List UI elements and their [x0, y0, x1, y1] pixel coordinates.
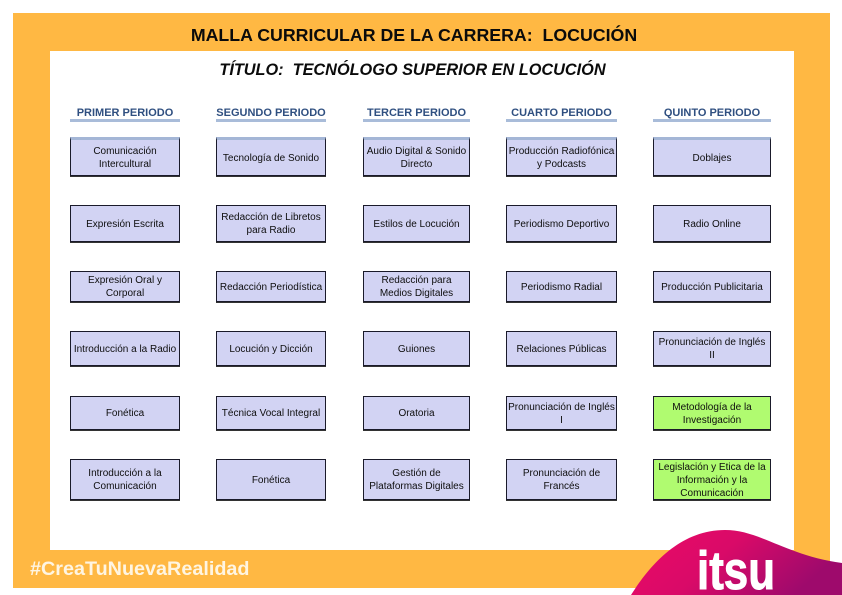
column: tercer periodo — [363, 137, 470, 501]
course — [363, 205, 470, 242]
course: Medios Digitales — [380, 288, 453, 299]
course: Pronunciación de — [523, 468, 600, 479]
course: Fonética — [106, 408, 144, 419]
course — [216, 459, 326, 500]
course: Plataformas Digitales — [369, 481, 464, 492]
course — [216, 271, 326, 302]
course — [70, 331, 180, 366]
course: green — [653, 459, 771, 500]
course: Expresión Escrita — [86, 218, 164, 230]
course: Gestión de — [392, 468, 441, 479]
course: Introducción a la — [88, 468, 162, 479]
column heading: primer periodo: PRIMER PERIODO — [77, 107, 173, 119]
course — [506, 396, 617, 430]
course — [506, 331, 617, 366]
course: green: Información y la — [677, 474, 747, 486]
column: primer periodo — [70, 137, 180, 501]
column: cuarto periodo — [506, 137, 617, 501]
course: Doblajes — [693, 152, 731, 164]
course: Producción Radiofónica — [509, 146, 614, 157]
course: Comunicación — [93, 146, 157, 157]
course: Relaciones Públicas — [516, 344, 607, 354]
column heading: tercer periodo: TERCER PERIODO — [367, 107, 466, 119]
course: Comunicación — [93, 481, 157, 492]
course: green: Metodología de la — [672, 402, 752, 412]
course: green: Comunicación — [680, 488, 744, 498]
course: I — [560, 414, 563, 426]
logo swoosh — [631, 530, 842, 595]
course — [653, 137, 771, 176]
course — [70, 396, 180, 430]
course: green — [653, 396, 771, 430]
course: Pronunciación de Inglés — [659, 337, 765, 348]
course — [506, 271, 617, 302]
course: Periodismo Radial — [521, 282, 602, 292]
column heading: segundo periodo: SEGUNDO PERIODO — [216, 107, 326, 119]
course — [216, 205, 326, 242]
subtitle: TÍTULO: TECNÓLOGO SUPERIOR EN LOCUCIÓN — [219, 61, 606, 79]
course — [363, 396, 470, 430]
course: para Radio — [247, 225, 295, 236]
column heading: cuarto periodo: CUARTO PERIODO — [511, 107, 612, 119]
column: quinto periodo — [653, 137, 771, 501]
course: Redacción para — [381, 275, 452, 286]
course: Periodismo Deportivo — [514, 218, 609, 230]
course — [506, 459, 617, 500]
course: y Podcasts — [537, 159, 586, 170]
course — [653, 205, 771, 242]
course: Francés — [543, 481, 580, 492]
course — [70, 137, 180, 176]
course: Pronunciación de Inglés — [508, 402, 615, 412]
course — [70, 459, 180, 500]
course — [363, 331, 470, 366]
column heading: quinto periodo — [653, 106, 771, 122]
course — [653, 331, 771, 366]
course — [216, 331, 326, 366]
course: Radio Online — [683, 218, 741, 230]
course: Redacción Periodística — [220, 282, 322, 292]
course: Expresión Oral y — [88, 275, 162, 286]
column heading: tercer periodo — [363, 106, 470, 122]
course — [70, 205, 180, 242]
course: Fonética — [252, 474, 290, 486]
course: Introducción a la Radio — [74, 344, 176, 354]
logo: itsu brand — [631, 530, 842, 595]
course — [363, 271, 470, 302]
course — [506, 205, 617, 242]
column: segundo periodo — [216, 137, 326, 501]
course: Estilos de Locución — [373, 218, 460, 230]
course — [653, 271, 771, 302]
course: Intercultural — [99, 159, 151, 170]
course: Guiones — [398, 344, 435, 354]
course: Producción Publicitaria — [661, 282, 763, 292]
hashtag: #CreaTuNuevaRealidad — [30, 558, 250, 580]
column heading: primer periodo — [70, 106, 180, 122]
course: Audio Digital & Sonido — [367, 146, 466, 157]
course: Corporal — [106, 288, 144, 299]
course — [216, 396, 326, 430]
course — [506, 137, 617, 176]
white content panel — [50, 51, 794, 550]
title: MALLA CURRICULAR DE LA CARRERA: LOCUCIÓN — [191, 25, 637, 45]
column heading: quinto periodo: QUINTO PERIODO — [664, 107, 760, 119]
course: II — [709, 350, 715, 361]
course: Redacción de Libretos — [221, 212, 321, 223]
course — [363, 459, 470, 500]
course — [363, 137, 470, 176]
course: Técnica Vocal Integral — [222, 408, 320, 419]
course — [70, 271, 180, 302]
course: green: Investigación — [683, 414, 741, 426]
column heading: cuarto periodo — [506, 106, 617, 122]
course: Oratoria — [398, 408, 435, 419]
course: green: Legislación y Etica de la — [658, 462, 766, 472]
course: Locución y Dicción — [229, 344, 313, 354]
course: Tecnología de Sonido — [223, 152, 319, 164]
course: Directo — [401, 159, 432, 170]
course — [216, 137, 326, 176]
